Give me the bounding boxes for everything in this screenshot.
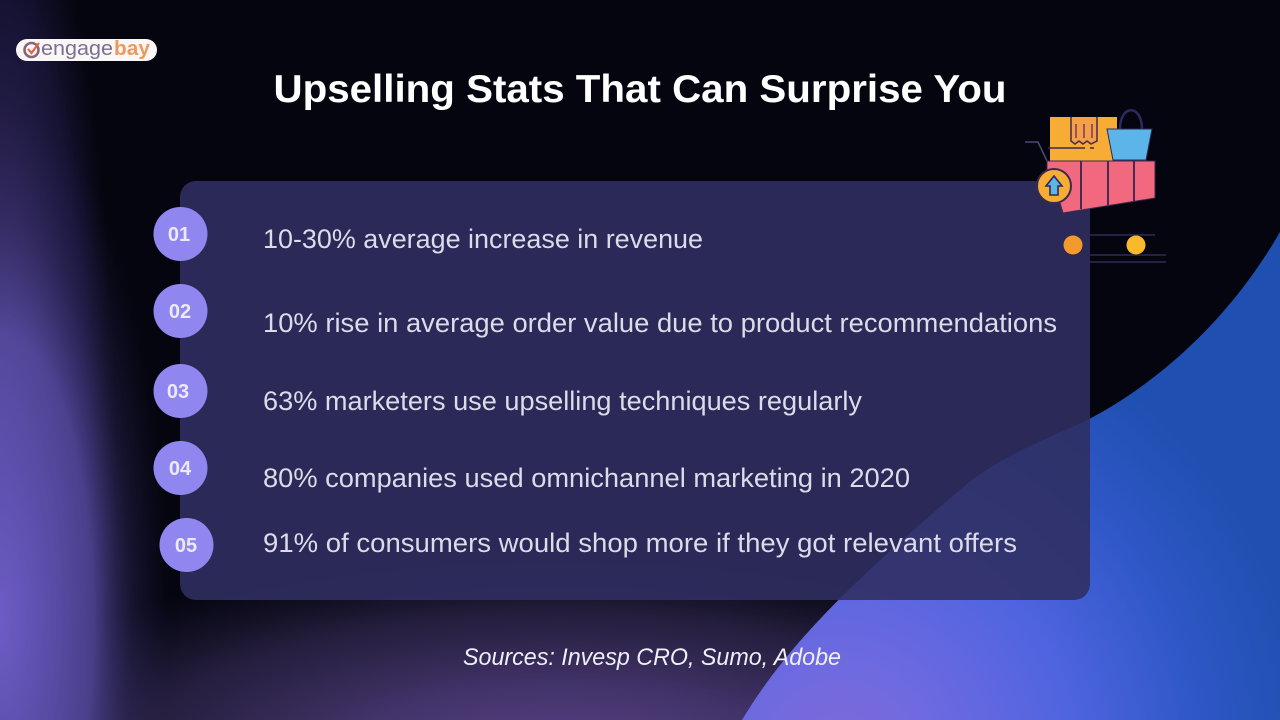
stat 03: 03 (167, 381, 189, 403)
icon: shopping cart with box and bag (1025, 110, 1166, 262)
logo: engagebay (16, 38, 157, 61)
sources note: Sources: Invesp CRO, Sumo, Adobe (463, 644, 841, 671)
stat 01: 01 (168, 224, 190, 246)
stat 02: 02 (169, 301, 191, 323)
stat 05: 05 (175, 535, 197, 557)
stat 05: 91% of consumers would shop more if they got relevant offers (263, 528, 1017, 558)
stat 04 (154, 441, 910, 495)
stat 03 (154, 364, 862, 418)
stat 01: 10-30% average increase in revenue (263, 224, 703, 254)
stat 04: 04 (169, 458, 192, 480)
stat 05 (160, 518, 1017, 572)
stat 02: 10% rise in average order value due to product recommendations (263, 308, 1057, 338)
stat 03: 63% marketers use upselling techniques regularly (263, 386, 862, 416)
panel: stats card (180, 181, 1090, 600)
title: Upselling Stats That Can Surprise You (274, 68, 1006, 111)
stat 04: 80% companies used omnichannel marketing in 2020 (263, 463, 910, 493)
stat 02 (154, 284, 1057, 338)
logo: engagebay: engage (41, 38, 113, 60)
logo: engagebay: bay (114, 38, 151, 60)
stat 01 (154, 207, 703, 261)
